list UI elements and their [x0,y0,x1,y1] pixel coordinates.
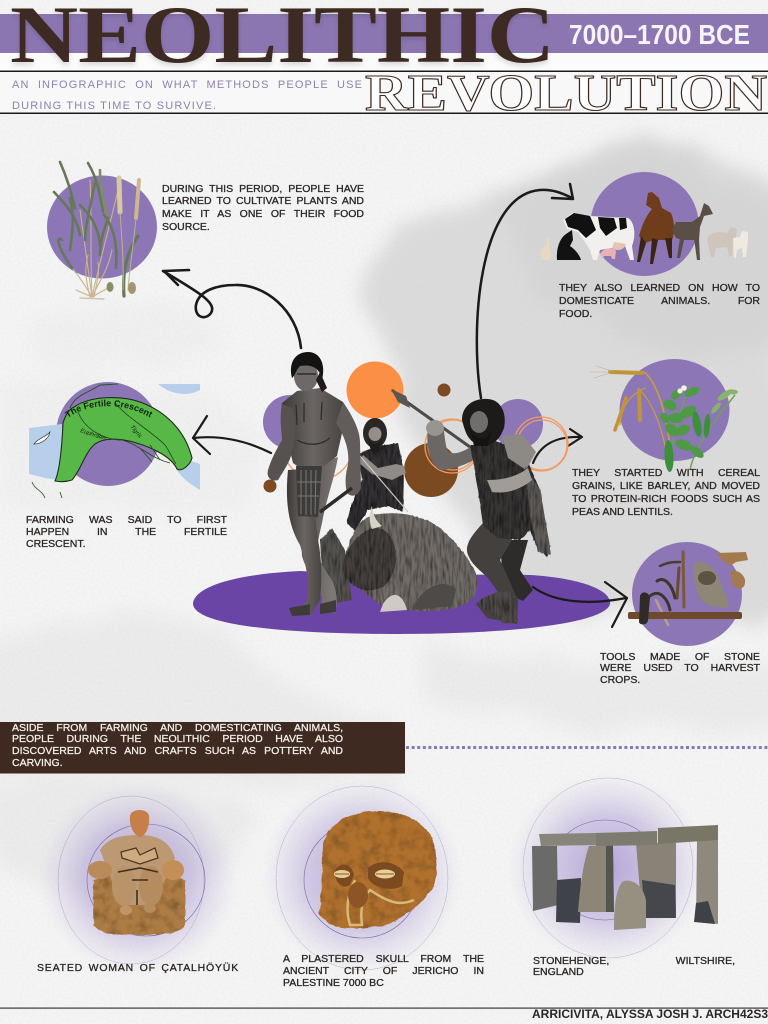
header: white lower strip [0,53,768,71]
icon: donkey [672,203,713,260]
icon: sheep [707,227,737,257]
right leg [298,457,338,613]
head [294,361,318,391]
icon: stone fragments [717,552,748,588]
map: seas [29,384,200,490]
figure: bison [342,506,478,612]
panel: fertile crescent map [29,382,200,498]
spear [392,390,470,447]
feet [289,600,336,616]
subtitle: DURING THIS TIME TO SURVIVE. [12,100,216,112]
arrow: man to animals [477,184,573,398]
panel: cereal grains and peas [590,359,738,472]
caption: plastered skull: PALESTINE 7000 BC [283,977,384,989]
purple circle behind plants [620,359,730,461]
left arm [268,404,295,481]
torso with fur [470,440,550,557]
text block: cultivated plants [162,182,364,233]
text block: cereal grains: PEAS AND LENTILS. [572,506,673,518]
text block: domesticated animals: THEY ALSO LEARNED ON HOW TO [559,282,760,294]
purple glow with rings [38,782,238,974]
caption: plastered skull [282,953,484,989]
map: Cyprus island [34,432,50,444]
text block: cereal grains: GRAINS, LIKE BARLEY, AND MOVED [572,480,760,492]
icon: horse [637,192,674,264]
text block: cereal grains [572,467,760,518]
icon: hand stone [698,571,716,585]
map labels [64,400,152,442]
icon: seated woman figurine [88,810,185,935]
map labels: The Fertile Crescent [64,400,152,418]
icon: cow [563,213,634,260]
icon: pea plant [658,385,738,472]
caption: stonehenge: ENGLAND [533,966,584,978]
icon: wild wheat plant [54,162,139,299]
text block: cultivated plants: LEARNED TO CULTIVATE PLANTS AND [162,195,364,207]
caption: plastered skull: ANCIENT CITY OF JERICHO IN [283,965,484,977]
dotted divider [406,746,768,749]
bent leg [467,523,518,624]
map labels: Tigris [128,424,142,439]
map: fertile crescent region [55,398,192,482]
panel: Stonehenge [508,773,718,963]
loincloth [296,466,322,517]
text block: fertile crescent [26,514,227,550]
caption: stonehenge: STONEHENGE, WILTSHIRE, [533,954,735,966]
panel: seated woman artefact [38,782,238,974]
text block: domesticated animals: FOOD. [559,308,592,320]
text block: arts and crafts banner: ASIDE FROM FARMING AND DOMESTICATING ANIMALS, [12,722,343,734]
date range: 7000–1700 BCE [569,19,750,50]
icon: goose [540,238,551,260]
icon: grinding stone [694,562,729,608]
text block: fertile crescent: CRESCENT. [26,538,86,550]
text block: arts and crafts banner [12,722,343,769]
back leg [500,540,533,601]
accent circles [263,362,568,497]
caption: plastered skull: A PLASTERED SKULL FROM THE [283,953,484,965]
central illustration: hunters and bison [193,352,610,634]
figure: second hunter [347,418,408,531]
icon: dog [557,230,581,260]
map labels: Euphrates [79,428,107,442]
panel: cultivated plants [47,162,157,299]
text block: stone tools: TOOLS MADE OF STONE [600,650,760,662]
subtitle strip background and rules [0,70,768,114]
text block: domesticated animals [559,282,760,320]
icon: lamb [733,231,748,258]
icon: barley [590,366,672,465]
caption: stonehenge [533,954,735,978]
credit: ARRICIVITA, ALYSSA JOSH J. ARCH42S3 [532,1009,768,1021]
text block: cultivated plants: MAKE IT AS ONE OF THEIR FOOD [162,208,364,220]
text block: cultivated plants: SOURCE. [162,221,210,233]
text block: arts and crafts banner: PEOPLE DURING THE NEOLITHIC PERIOD HAVE ALSO [12,733,343,745]
text block: domesticated animals: DOMESTICATE ANIMALS. FOR [559,295,760,307]
map: rivers and borders [32,384,176,498]
header: purple band [0,14,768,53]
left leg [287,468,321,616]
text block: stone tools: CROPS. [600,674,640,686]
arrow: man to grains [533,429,582,463]
icon: pig [600,248,616,259]
subtitle: AN INFOGRAPHIC ON WHAT METHODS PEOPLE USE [12,79,362,91]
purple glow with rings [262,777,462,973]
purple circle behind tools [632,542,742,646]
purple circle behind plant [47,176,157,278]
text block: cereal grains: TO PROTEIN-RICH FOODS SUCH AS [572,493,760,505]
text block: cultivated plants: DURING THIS PERIOD, PEOPLE HAVE [162,182,364,194]
purple circle behind animals [590,172,698,276]
text block: fertile crescent: HAPPEN IN THE FERTILE [26,526,227,538]
purple ground ellipse [193,571,610,634]
icon: stonehenge stones [532,825,718,930]
text block: arts and crafts banner: DISCOVERED ARTS AND CRAFTS SUCH AS POTTERY AND [12,745,343,757]
title: REVOLUTION outlined: REVOLUTION [365,65,767,122]
text block: stone tools: WERE USED TO HARVEST [600,662,760,674]
text block: stone tools [600,650,760,686]
purple circle behind map [56,382,160,486]
subtitle [12,79,362,112]
brown banner [0,722,405,774]
figure: standing man with loincloth [268,352,361,616]
panel: domesticated animals [540,172,748,276]
caption: seated woman: SEATED WOMAN OF ÇATALHÖYÜK [37,962,239,974]
text block: cereal grains: THEY STARTED WITH CEREAL [572,467,760,479]
icon: hammer [628,592,742,624]
icon: sickles and handles [650,552,684,625]
panel: stone tools [628,542,748,646]
purple glow with rings [508,773,708,963]
bushes behind bison [320,528,352,604]
arrow: man to map [193,416,271,454]
icon: plastered skull [319,811,437,929]
arrow: man to tools [533,582,627,627]
head and hair [462,399,505,446]
arrow: man to plants [163,270,301,348]
right arm [336,402,361,496]
torso [281,388,344,468]
text block: arts and crafts banner: CARVING. [12,757,63,769]
bottom rule [0,1008,768,1009]
raised arm [427,426,488,470]
panel: plastered skull artefact [262,777,462,973]
text block: fertile crescent: FARMING WAS SAID TO FIRST [26,514,227,526]
figure: hunter with raised spear [391,389,551,624]
